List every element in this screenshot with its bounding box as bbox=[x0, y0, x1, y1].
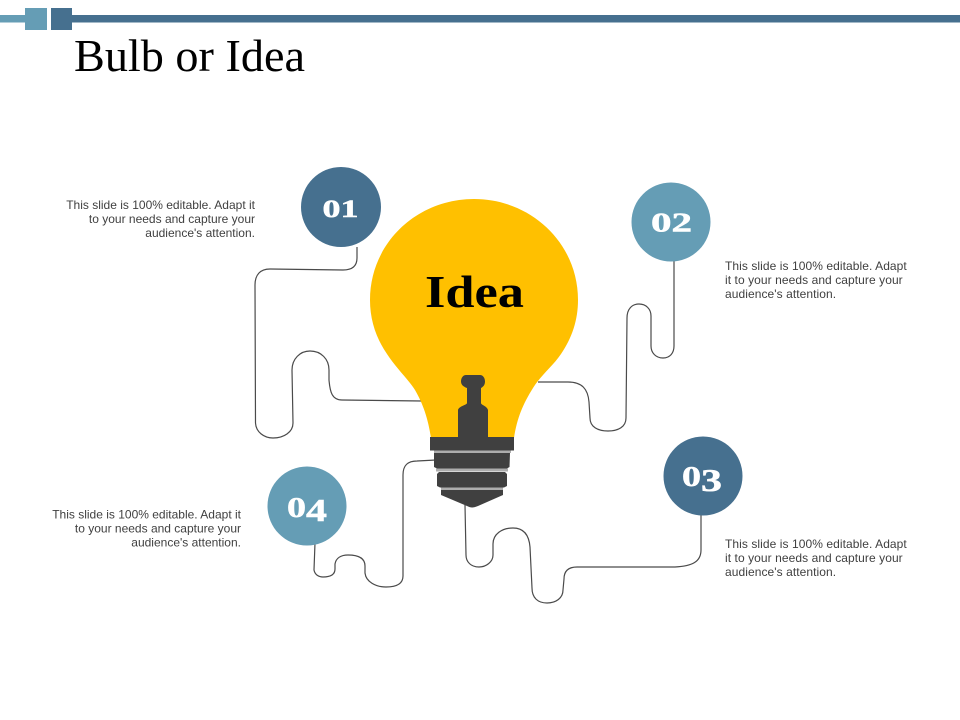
badge 02 bbox=[632, 182, 710, 262]
text block 04 bbox=[52, 508, 242, 550]
text block 03 bbox=[725, 537, 907, 579]
text block 03: This slide is 100% editable. Adapt bbox=[725, 537, 907, 551]
text block 01: This slide is 100% editable. Adapt it bbox=[66, 198, 256, 212]
badge 03: 0 bbox=[682, 461, 696, 493]
badge 04: 4 bbox=[306, 492, 327, 528]
bulb glass bbox=[370, 199, 578, 438]
badge 04: 0 bbox=[287, 492, 302, 524]
badge 03 bbox=[664, 436, 742, 516]
badge 01 bbox=[301, 167, 381, 247]
connector wire 04 bbox=[314, 460, 436, 587]
text block 01 bbox=[66, 198, 256, 240]
text block 02: it to your needs and capture your bbox=[725, 273, 903, 287]
screw base bbox=[430, 437, 514, 508]
title: Bulb or Idea bbox=[74, 30, 305, 81]
badge 03: 3 bbox=[701, 462, 722, 498]
text block 03: it to your needs and capture your bbox=[725, 551, 903, 565]
text block 01: to your needs and capture your bbox=[89, 212, 255, 226]
connector wire 02 bbox=[538, 260, 674, 431]
filament bbox=[458, 375, 488, 440]
badge 04 bbox=[268, 466, 346, 546]
text block 02 bbox=[725, 259, 907, 301]
text block 02: This slide is 100% editable. Adapt bbox=[725, 259, 907, 273]
text block 04: to your needs and capture your bbox=[75, 522, 241, 536]
connector wire 03 bbox=[465, 505, 701, 603]
bulb label: Idea bbox=[425, 266, 524, 317]
light bulb bbox=[370, 199, 578, 508]
text block 04: This slide is 100% editable. Adapt it bbox=[52, 508, 242, 522]
connector wire 01 bbox=[255, 247, 422, 438]
badge 01: 01 bbox=[322, 196, 358, 223]
badge 02: 02 bbox=[651, 208, 692, 238]
text block 02: audience's attention. bbox=[725, 287, 836, 301]
text block 03: audience's attention. bbox=[725, 565, 836, 579]
text block 04: audience's attention. bbox=[131, 536, 241, 550]
header decoration bar bbox=[0, 8, 960, 30]
text block 01: audience's attention. bbox=[145, 226, 255, 240]
